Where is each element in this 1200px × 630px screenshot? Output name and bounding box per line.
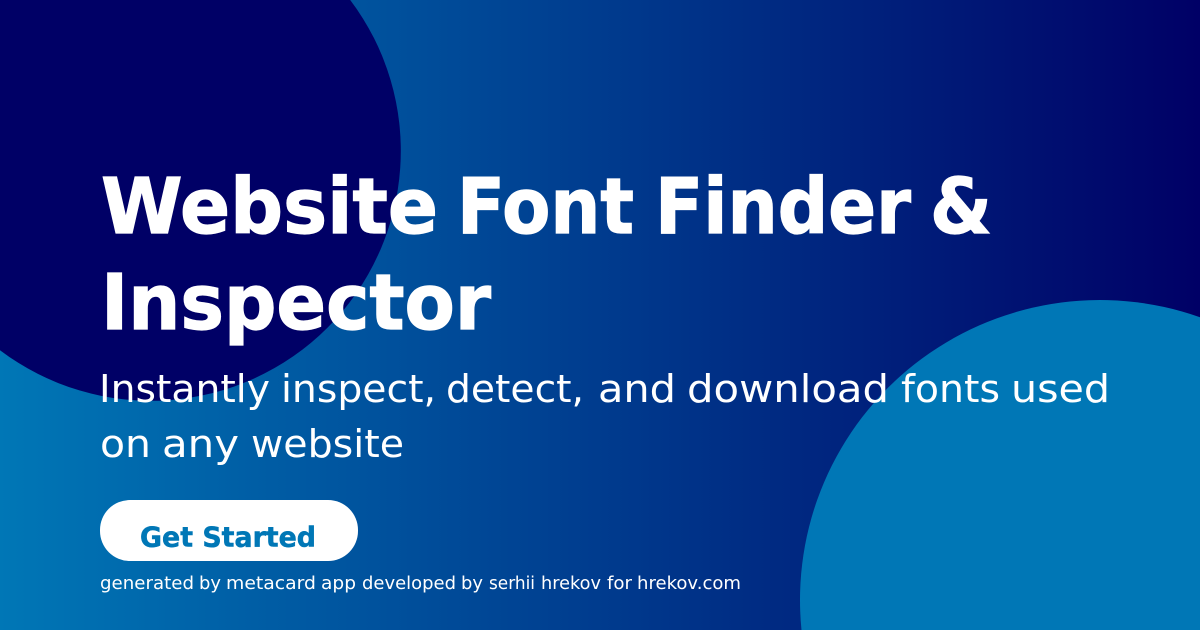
title: Website xyxy=(101,163,438,252)
decorative circle: top left xyxy=(0,0,401,401)
title: Finder xyxy=(655,163,911,252)
call to action button: Get Started xyxy=(140,520,316,554)
subtitle: used xyxy=(1011,367,1110,411)
footer credit: for xyxy=(607,574,633,594)
subtitle: Instantly xyxy=(99,367,270,411)
subtitle: and xyxy=(598,367,676,411)
footer credit xyxy=(100,574,741,594)
call to action button xyxy=(100,500,358,561)
footer credit: hrekov.com xyxy=(637,574,741,594)
footer credit: by xyxy=(461,574,483,594)
footer credit: developed xyxy=(362,574,456,594)
subtitle: any xyxy=(162,422,239,466)
footer credit: hrekov xyxy=(541,574,601,594)
title: Font xyxy=(457,163,634,252)
footer credit: metacard xyxy=(226,574,316,594)
subtitle: detect, xyxy=(446,367,584,411)
subtitle: website xyxy=(251,422,404,466)
title xyxy=(101,163,992,348)
subtitle: download xyxy=(687,367,889,411)
subtitle: on xyxy=(100,422,151,466)
subtitle: fonts xyxy=(901,367,1000,411)
subtitle xyxy=(99,367,1110,466)
footer credit: app xyxy=(321,574,356,594)
footer credit: generated xyxy=(100,574,194,594)
decorative circle: bottom right xyxy=(800,300,1200,630)
footer credit: serhii xyxy=(489,574,535,594)
footer credit: by xyxy=(199,574,221,594)
subtitle: inspect, xyxy=(281,367,436,411)
title: Inspector xyxy=(101,259,491,348)
title: & xyxy=(930,163,992,252)
